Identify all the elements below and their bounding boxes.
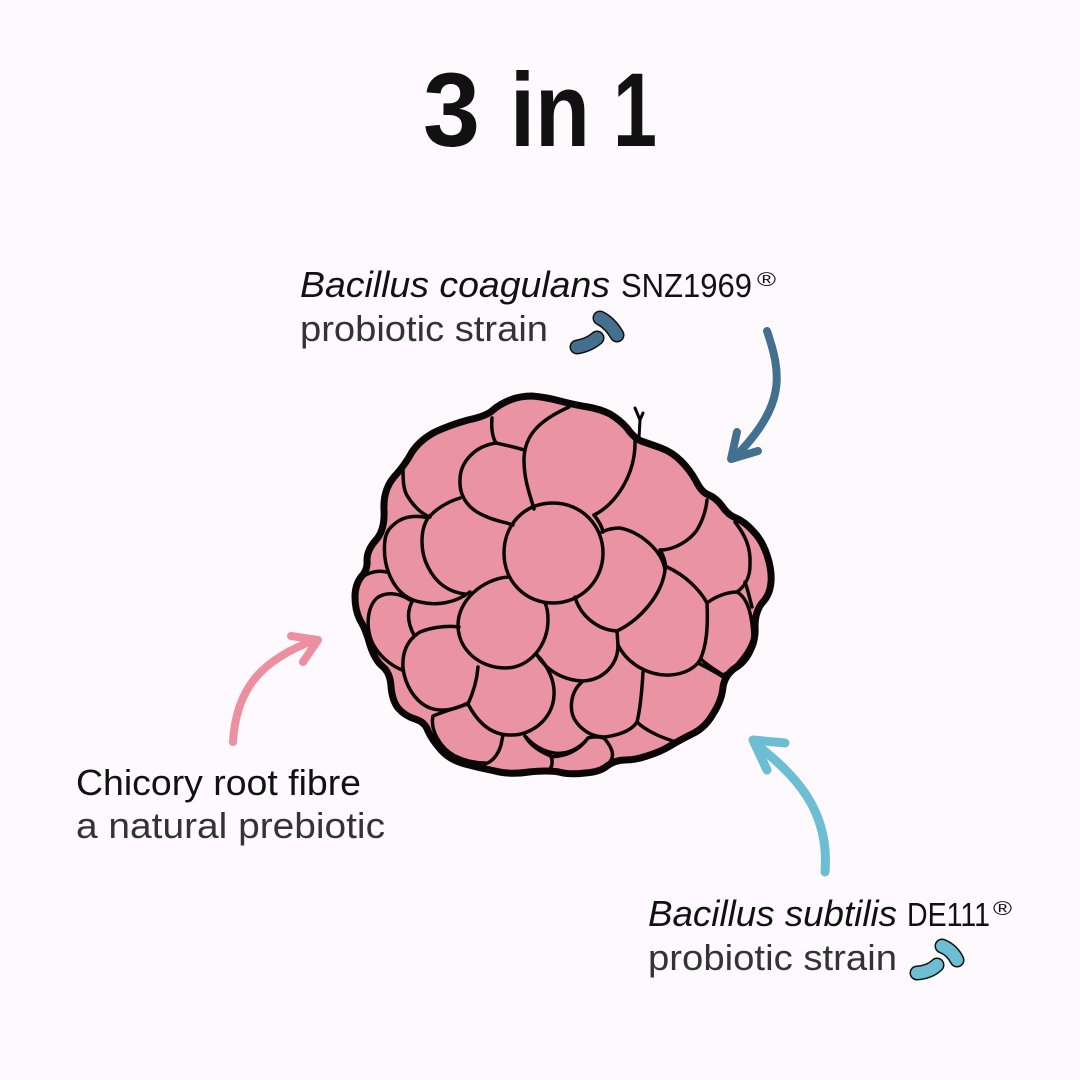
arrow: dark blue [731,331,777,459]
illustration: chicory root [355,396,771,774]
label: Bacillus subtilis [648,893,1012,978]
cell walls [362,407,753,770]
title: in [510,52,590,169]
label: Bacillus subtilis: DE111 [907,896,990,933]
label: Chicory root fibre [76,762,385,846]
arrow: pink [233,636,318,742]
arrow: light blue [753,740,825,872]
label: Chicory root fibre: a natural prebiotic [76,805,385,846]
icon: dark blue bacteria [577,318,617,347]
label: Bacillus coagulans: Bacillus coagulans [300,264,610,305]
label: Bacillus coagulans: probiotic strain [300,308,548,349]
icon: light blue bacteria [917,946,957,973]
label: Bacillus coagulans: SNZ1969 [621,267,752,304]
title [423,52,657,169]
title: 3 [423,52,480,169]
label: Bacillus coagulans: ® [757,270,776,291]
root spike [635,408,643,438]
label: Bacillus coagulans [300,264,776,349]
label: Bacillus subtilis: Bacillus subtilis [648,893,897,934]
title: 1 [613,52,657,169]
label: Chicory root fibre: Chicory root fibre [76,762,361,803]
root outline [355,396,771,774]
label: Bacillus subtilis: probiotic strain [648,937,897,978]
label: Bacillus subtilis: ® [993,899,1012,920]
